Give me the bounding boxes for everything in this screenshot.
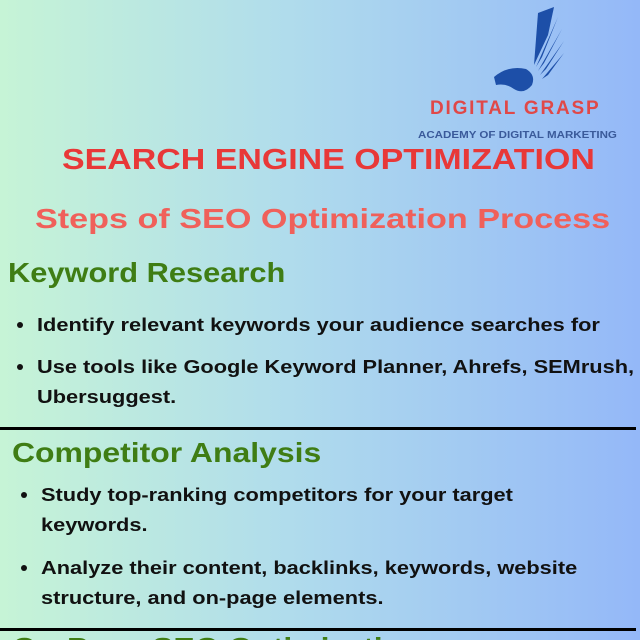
bullet 1 bbox=[41, 480, 431, 540]
heading: Keyword Research bbox=[8, 257, 285, 288]
heading: Competitor Analysis bbox=[12, 437, 321, 468]
bullet 2: structure, and on-page elements. bbox=[41, 588, 384, 608]
bullet 1: Study top-ranking competitors for your target bbox=[41, 485, 513, 505]
section: keyword research bbox=[8, 257, 634, 407]
brand name: DIGITAL GRASP bbox=[430, 98, 600, 119]
bullet 2 bbox=[37, 352, 530, 412]
subtitle: Steps of SEO Optimization Process bbox=[35, 203, 610, 234]
logo bbox=[418, 7, 617, 141]
tagline: ACADEMY OF DIGITAL MARKETING bbox=[418, 129, 617, 141]
bullet 2: Ubersuggest. bbox=[37, 387, 176, 407]
bullet 1: Identify relevant keywords your audience searches for bbox=[37, 315, 600, 335]
section: competitor analysis bbox=[12, 437, 577, 608]
bullet 2: Use tools like Google Keyword Planner, Ahrefs, SEMrush, bbox=[37, 357, 634, 377]
bullet 1: keywords. bbox=[41, 515, 148, 535]
title: SEARCH ENGINE OPTIMIZATION bbox=[62, 144, 595, 176]
bullet 2: Analyze their content, backlinks, keywords, website bbox=[41, 558, 577, 578]
icon: eagle bbox=[494, 7, 564, 92]
bullet 2 bbox=[41, 553, 484, 613]
